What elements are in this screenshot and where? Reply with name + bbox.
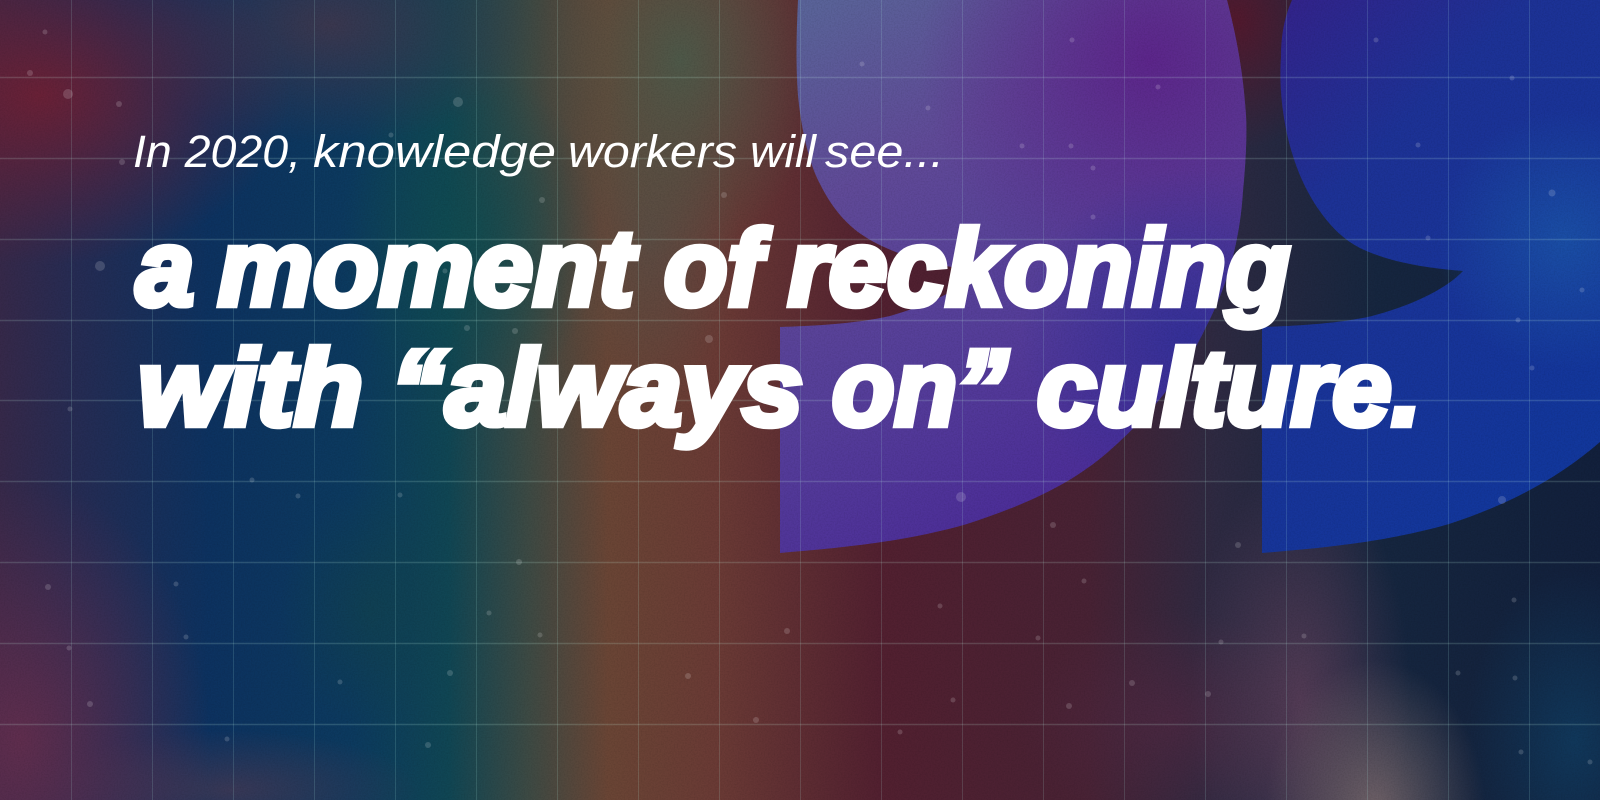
- subtitle: see...: [825, 126, 944, 177]
- headline line 2: “always: [391, 327, 803, 448]
- subtitle: will: [750, 126, 818, 177]
- headline line 2: culture.: [1037, 327, 1421, 448]
- subtitle: [133, 126, 944, 177]
- headline line 1: of: [664, 207, 771, 328]
- headline line 1: a: [136, 207, 194, 328]
- subtitle: knowledge: [313, 126, 556, 177]
- headline line 1: moment: [218, 207, 638, 328]
- icon: left quotation mark: [780, 0, 1246, 553]
- icon: right quotation mark: [1262, 0, 1600, 553]
- headline line 1: reckoning: [788, 207, 1290, 328]
- headline line 2: on”: [832, 327, 1008, 448]
- headline line 2: with: [138, 327, 363, 448]
- headline line 1: [136, 207, 1290, 328]
- headline line 2: [138, 327, 1421, 448]
- headline: [136, 207, 1421, 448]
- subtitle: In 2020,: [133, 126, 301, 177]
- subtitle: workers: [568, 126, 737, 177]
